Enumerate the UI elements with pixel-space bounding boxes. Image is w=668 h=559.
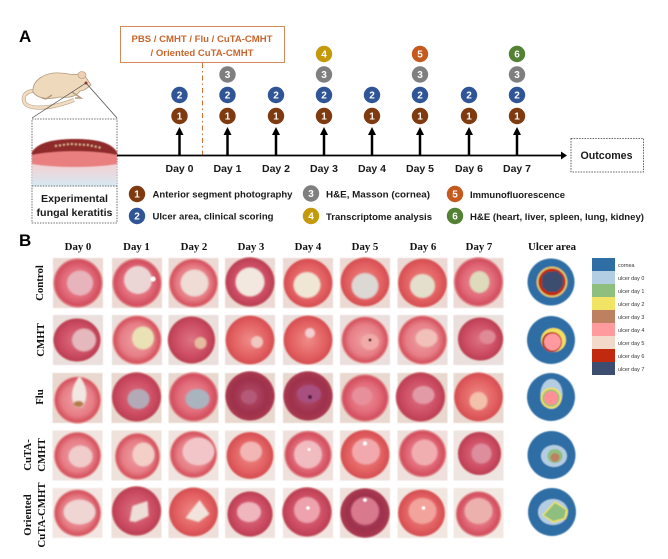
timepoint: Day 6: 1: [466, 112, 472, 122]
legend: assessments: 2: [134, 212, 140, 222]
ulcer map: CMHT: [527, 316, 575, 364]
legend: ulcer area: ulcer day 7: [618, 367, 644, 373]
timepoint: Day 5: 1: [417, 112, 423, 122]
timepoint: Day 1: Day 1: [213, 163, 242, 175]
row labels: CMHT: [35, 322, 47, 357]
legend: assessments: H&E (heart, liver, spleen, lung, kidney): [470, 211, 644, 222]
label: panel A: A: [19, 27, 31, 46]
timepoint: Day 1: 3: [225, 70, 231, 81]
timepoint: Day 0: 1: [177, 112, 183, 122]
timepoint: Day 4: 1: [369, 112, 375, 122]
timepoint: Day 0: Day 0: [165, 163, 194, 175]
legend: assessments: Anterior segment photography: [152, 188, 293, 200]
column headings: Day 1: [123, 241, 150, 253]
label: experimental fungal keratitis: Experimental: [41, 193, 108, 205]
timepoint: Day 7: 6: [514, 50, 520, 60]
zoom lines from mouse eye: [32, 83, 117, 118]
timepoint: Day 4: Day 4: [358, 163, 386, 175]
legend: assessments: H&E, Masson (cornea): [326, 188, 430, 200]
row labels: [22, 265, 48, 548]
timepoint: Day 7: 3: [514, 70, 520, 81]
timepoint: Day 3: 3: [321, 70, 327, 81]
legend: assessments: Ulcer area, clinical scoring: [152, 210, 274, 222]
outcomes box: [571, 138, 644, 172]
column headings: Day 6: [410, 241, 437, 253]
legend: ulcer area: ulcer day 1: [618, 289, 644, 295]
timepoint: Day 6: [455, 87, 483, 175]
icon: cornea tissue section: [32, 139, 117, 186]
treatment start marker: [202, 63, 204, 155]
legend: ulcer area: ulcer day 0: [618, 276, 644, 282]
row labels: Control: [34, 265, 46, 301]
legend: assessments: Immunofluorescence: [470, 189, 565, 200]
row labels: CMHT: [36, 437, 48, 472]
column headings: Day 0: [65, 241, 91, 253]
legend: ulcer area: [592, 258, 644, 375]
timepoint: Day 5: 2: [417, 90, 423, 102]
ulcer map: Flu: [527, 373, 575, 421]
timepoint: Day 2: 2: [273, 90, 279, 102]
panel: experimental fungal keratitis: [32, 119, 117, 223]
column headings: [65, 241, 577, 253]
row: Oriented CuTA-CMHT: [52, 486, 504, 538]
legend: assessments: Transcriptome analysis: [326, 211, 432, 222]
legend: ulcer area: ulcer day 6: [618, 354, 644, 360]
timepoint: Day 5: 5: [417, 50, 423, 60]
legend: assessments: 4: [308, 212, 314, 222]
icon: mouse: [24, 72, 91, 108]
column headings: Day 5: [352, 241, 378, 253]
timepoint: Day 4: [358, 87, 386, 175]
timepoint: Day 7: [503, 46, 531, 175]
timepoint: Day 4: 2: [369, 90, 375, 102]
column headings: Day 7: [466, 241, 493, 253]
timepoint: Day 1: 1: [225, 112, 231, 122]
legend: ulcer area: ulcer day 3: [618, 315, 644, 321]
legend: ulcer area: ulcer day 4: [618, 328, 644, 334]
label: experimental fungal keratitis: [36, 193, 113, 219]
timepoint: Day 2: [262, 87, 290, 175]
column headings: Ulcer area: [528, 241, 577, 253]
timepoint: Day 0: [165, 87, 194, 175]
timepoint: Day 3: 2: [321, 90, 327, 102]
photo grid: [52, 257, 504, 538]
column headings: Day 2: [181, 241, 207, 253]
treatment box: [120, 26, 284, 62]
ulcer map: Control: [528, 258, 574, 306]
timepoint: Day 7: Day 7: [503, 163, 531, 175]
row: CMHT: [53, 315, 504, 365]
row labels: Flu: [34, 389, 46, 405]
legend: assessments: 5: [452, 190, 458, 200]
timepoint: Day 6: Day 6: [455, 163, 483, 175]
legend: ulcer area: cornea: [618, 263, 634, 269]
row: Flu: [52, 371, 504, 424]
timepoint: Day 2: 1: [273, 112, 279, 122]
row: Control: [53, 257, 504, 308]
timepoint: Day 1: 2: [225, 90, 231, 102]
timepoint: Day 3: 1: [321, 112, 327, 122]
column headings: Day 4: [295, 241, 322, 253]
timepoint: Day 6: 2: [466, 90, 472, 102]
timepoint: Day 5: [406, 46, 434, 175]
timepoint: Day 7: 1: [514, 112, 520, 122]
treatment box: / Oriented CuTA-CMHT: [150, 48, 254, 59]
column headings: Day 3: [238, 241, 265, 253]
label: panel B: B: [19, 231, 31, 250]
row labels: Oriented: [22, 494, 34, 536]
row labels: CuTA-CMHT: [36, 482, 48, 548]
timepoint: Day 2: Day 2: [262, 163, 290, 175]
legend: assessments: 1: [134, 190, 140, 200]
label: experimental fungal keratitis: fungal keratitis: [36, 207, 113, 219]
timepoint: Day 5: Day 5: [406, 163, 434, 175]
timepoint: Day 3: 4: [321, 50, 327, 60]
outcomes box: Outcomes: [580, 150, 632, 162]
timepoint: Day 0: 2: [177, 90, 183, 102]
row labels: CuTA-: [22, 439, 34, 471]
legend: ulcer area: ulcer day 2: [618, 302, 644, 308]
ulcer map: Oriented CuTA-CMHT: [528, 488, 576, 536]
treatment box: PBS / CMHT / Flu / CuTA-CMHT: [132, 34, 273, 45]
timepoint: Day 7: 2: [514, 90, 520, 102]
timeline axis: [117, 152, 567, 160]
timepoint: Day 1: [213, 66, 242, 175]
legend: assessments: [129, 185, 644, 224]
legend: assessments: 3: [308, 189, 314, 200]
timepoint: Day 3: [310, 46, 338, 175]
ulcer map: CuTA-CMHT: [528, 431, 576, 479]
legend: assessments: 6: [452, 212, 458, 222]
legend: ulcer area: ulcer day 5: [618, 341, 644, 347]
timepoint: Day 5: 3: [417, 70, 423, 81]
timepoint: Day 3: Day 3: [310, 163, 338, 175]
row: CuTA-CMHT: [52, 430, 504, 480]
